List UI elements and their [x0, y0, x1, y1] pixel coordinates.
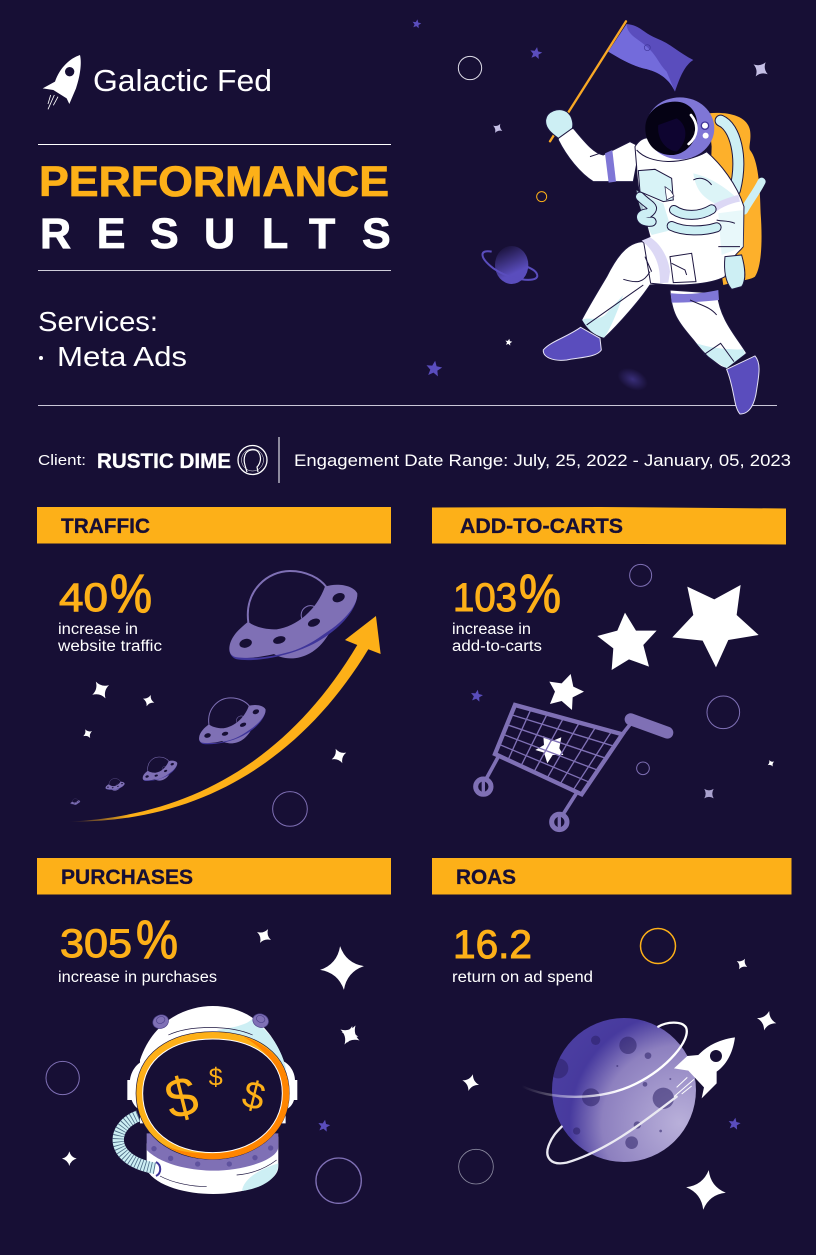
helmet — [645, 97, 714, 159]
dollar signs: $ — [159, 1063, 204, 1132]
client row: RUSTIC DIME — [97, 450, 231, 473]
panel: purchases — [37, 858, 391, 1203]
client row: Client: — [38, 452, 86, 469]
traffic caption: website traffic — [57, 638, 162, 655]
cart — [476, 705, 667, 830]
bands — [605, 150, 740, 303]
suit wrinkle lines — [587, 150, 740, 368]
add-to-carts caption: increase in — [452, 621, 531, 638]
body suit — [558, 128, 747, 368]
add-to-carts caption — [452, 621, 542, 655]
planet — [548, 1018, 696, 1162]
services list: Meta Ads — [57, 341, 187, 372]
orbit rings — [522, 1023, 687, 1163]
services list — [38, 306, 187, 372]
stat: 103%: 103 — [453, 576, 517, 620]
illustration: planet and rocket — [459, 1008, 779, 1213]
tubes — [721, 121, 762, 211]
roas header bar — [432, 858, 792, 894]
stat: 40%: 40 — [59, 576, 108, 620]
chest tubes and pack — [640, 197, 717, 230]
collar — [147, 1133, 278, 1171]
purchases header bar: PURCHASES — [61, 866, 193, 889]
traffic caption: increase in — [58, 621, 138, 638]
purchases sparkles — [253, 925, 366, 1050]
icon: rocket — [43, 55, 81, 109]
flag — [550, 21, 693, 141]
client row: Engagement Date Range: July, 25, 2022 - January, 05, 2023 — [294, 451, 791, 470]
knobs — [151, 1012, 270, 1031]
logo wordmark: Galactic Fed — [93, 64, 272, 98]
ear pieces — [127, 1062, 142, 1110]
client row — [38, 437, 791, 483]
add-to-carts caption: add-to-carts — [452, 638, 542, 655]
stat: 16.2: 16.2 — [453, 923, 532, 967]
add-to-carts header bar — [432, 507, 786, 544]
icon: client logo — [238, 446, 267, 474]
hero illustration: astronaut with flag and decorations — [412, 19, 773, 414]
logo: Galactic Fed — [43, 55, 272, 109]
roas header bar: ROAS — [456, 866, 516, 889]
purchases header bar — [37, 858, 391, 894]
visor rim — [136, 1032, 289, 1159]
title: performance: PERFORMANCE — [39, 158, 389, 206]
backpack — [708, 113, 762, 285]
stat: 40% — [59, 564, 152, 624]
left glove — [546, 110, 573, 138]
hose — [118, 1116, 160, 1176]
services list: Services: — [38, 306, 158, 337]
panel: traffic — [37, 507, 391, 826]
chart: planets and growth arrow — [68, 571, 381, 826]
roas top decorations — [640, 928, 750, 972]
stat: 305%: 305 — [60, 922, 132, 966]
stat: 305%: % — [136, 910, 178, 970]
stat: 103% — [453, 564, 561, 624]
illustration: cart and stars — [470, 564, 776, 830]
visor glass — [143, 1039, 282, 1153]
traffic caption — [57, 621, 162, 655]
illustration: helmet with dollar signs — [46, 1006, 361, 1203]
dollar signs — [159, 1063, 269, 1132]
dollar signs: $ — [209, 1063, 223, 1091]
decorative space objects — [412, 19, 773, 395]
neck — [147, 1137, 278, 1194]
suit shading — [582, 173, 745, 368]
stat: 103%: % — [519, 564, 561, 624]
stat: 40%: % — [110, 564, 152, 624]
hip pocket — [670, 253, 696, 283]
right glove — [725, 255, 745, 289]
stat: 305% — [60, 910, 178, 970]
roas caption: return on ad spend — [452, 969, 593, 986]
traffic header bar — [37, 507, 391, 544]
traffic header bar: TRAFFIC — [61, 515, 150, 538]
dollar signs: $ — [238, 1073, 269, 1120]
add-to-carts header bar: ADD-TO-CARTS — [460, 515, 623, 538]
panel: roas — [432, 858, 792, 1213]
mini planet — [482, 246, 537, 284]
title: results: RESULTS — [40, 210, 391, 258]
dome — [140, 1006, 286, 1123]
purchases caption: increase in purchases — [58, 969, 217, 986]
rocket — [674, 1037, 735, 1098]
arrow — [68, 616, 381, 822]
boots — [543, 327, 759, 414]
panel: add-to-carts — [432, 507, 786, 830]
